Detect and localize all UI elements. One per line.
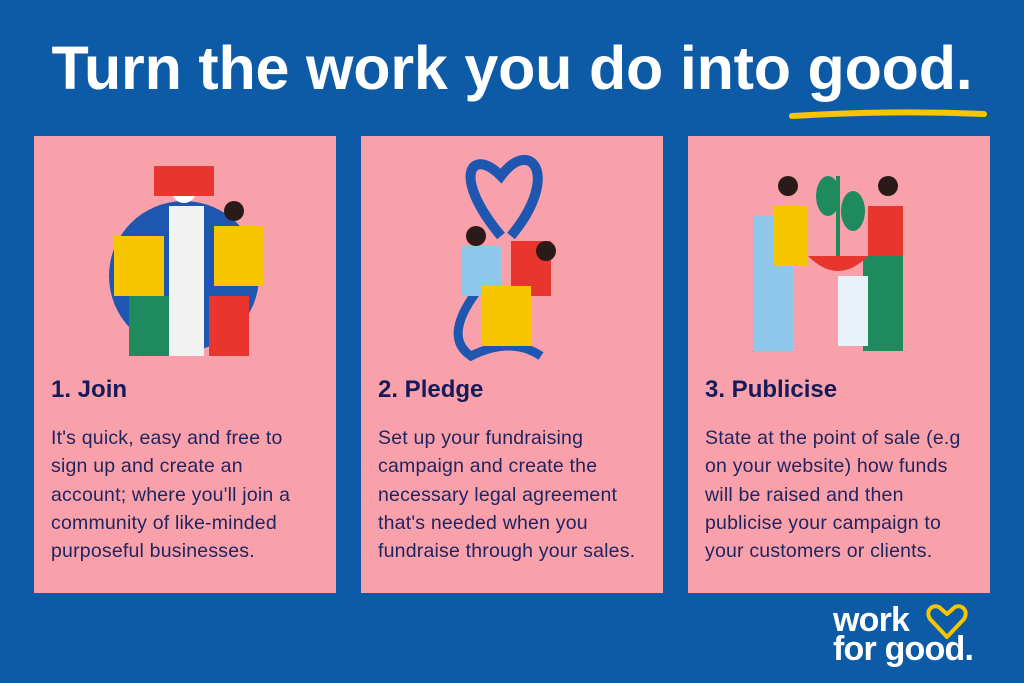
text (378, 427, 635, 562)
text: that's needed when you (378, 512, 588, 534)
panel: publicise (688, 136, 990, 593)
text: campaign and create the (378, 455, 597, 477)
icon: heart (926, 604, 968, 640)
text: Set up your fundraising (378, 427, 583, 449)
text: your customers or clients. (705, 540, 932, 562)
text: State at the point of sale (e.g (705, 427, 961, 449)
text: community of like-minded (51, 512, 277, 534)
text: fundraise through your sales. (378, 540, 635, 562)
logo (832, 601, 973, 668)
panel: pledge (361, 136, 663, 593)
text: purposeful businesses. (51, 540, 255, 562)
illustration: plant (753, 176, 903, 351)
text (51, 427, 290, 562)
text: publicise your campaign to (705, 512, 941, 534)
text: It's quick, easy and free to (51, 427, 283, 449)
title: Turn the work you do into good. (51, 34, 973, 102)
heading: 3. Publicise (705, 376, 837, 403)
illustration: community (109, 166, 264, 356)
heading: 2. Pledge (378, 376, 483, 403)
text: on your website) how funds (705, 455, 948, 477)
text: necessary legal agreement (378, 484, 617, 506)
logo: for good. (833, 630, 973, 668)
panel: join (34, 136, 336, 593)
text: account; where you'll join a (51, 484, 290, 506)
heading: 1. Join (51, 376, 127, 403)
logo: work (833, 601, 909, 639)
text: sign up and create an (51, 455, 243, 477)
underline (789, 109, 987, 119)
text (705, 427, 961, 562)
illustration: heart (454, 154, 556, 362)
text: will be raised and then (705, 484, 904, 506)
